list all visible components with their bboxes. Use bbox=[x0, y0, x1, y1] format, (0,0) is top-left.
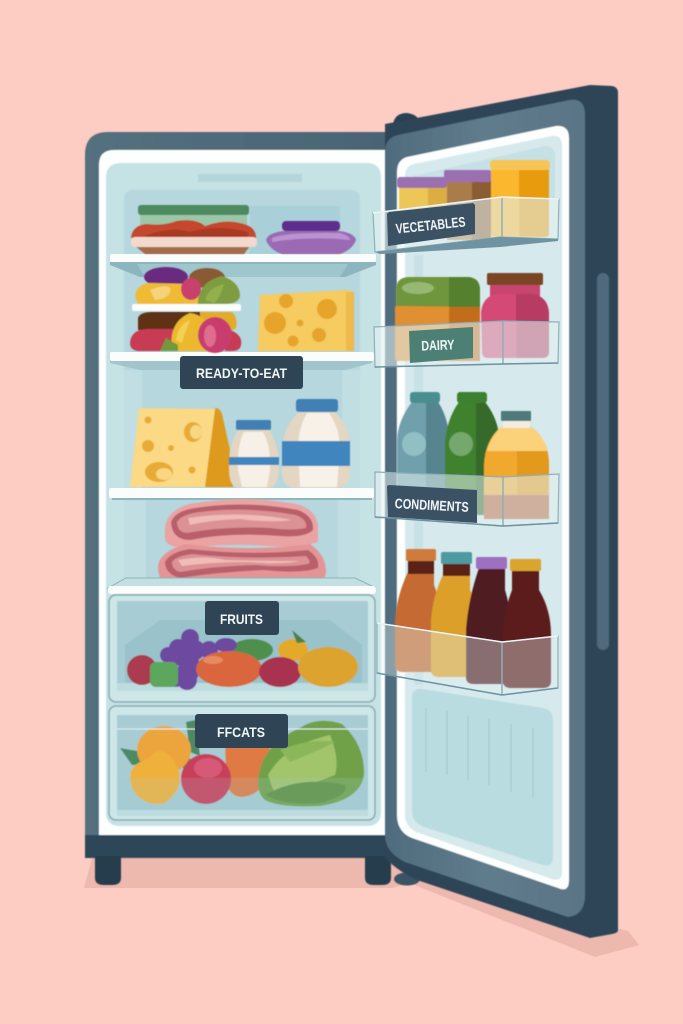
shelf 3 bbox=[109, 488, 374, 500]
door light inner bbox=[405, 136, 562, 880]
fruit: small yellow bbox=[278, 630, 308, 661]
open door bbox=[385, 85, 618, 938]
upper recess bbox=[250, 206, 340, 254]
label: ffcats: FFCATS bbox=[217, 724, 265, 740]
label: vegetables bbox=[387, 203, 475, 246]
label: dairy: DAIRY bbox=[421, 336, 455, 354]
handle bbox=[597, 273, 609, 650]
food: purple dish bbox=[266, 221, 356, 254]
refrigerator body bbox=[85, 132, 391, 885]
veg: cabbage bbox=[258, 721, 364, 806]
veg: red apple bbox=[181, 754, 231, 804]
fruit: yellow mango bbox=[298, 647, 358, 687]
floor shadow bbox=[84, 858, 639, 957]
fruit: orange bbox=[196, 651, 262, 687]
cabinet shell bbox=[85, 132, 390, 836]
veg: yellow apple bbox=[130, 751, 180, 804]
door foot bbox=[394, 872, 420, 886]
door row 4: sauce bottles bbox=[395, 549, 551, 688]
label: dairy bbox=[409, 327, 473, 363]
door dark shell bbox=[385, 85, 618, 938]
drawer: fruits bbox=[109, 595, 375, 702]
door bin 2 bbox=[374, 321, 559, 367]
veg: orange squash bbox=[225, 745, 270, 797]
door row 2: containers bbox=[395, 273, 549, 361]
label: ffcats bbox=[195, 714, 288, 748]
pink jar bbox=[481, 273, 549, 358]
label: condiments bbox=[387, 485, 477, 523]
back panel bbox=[124, 190, 360, 590]
door bin 3 bbox=[375, 472, 559, 526]
interior wall bbox=[106, 163, 381, 826]
bottle dark red bbox=[503, 559, 551, 688]
food: large milk bottle bbox=[282, 399, 350, 488]
door white liner bbox=[397, 126, 569, 889]
top slab bbox=[165, 499, 318, 548]
bottle caramel bbox=[395, 549, 440, 672]
bottle plum bbox=[466, 557, 510, 684]
bottle mustard bbox=[431, 552, 476, 677]
foot right bbox=[365, 856, 391, 885]
glass shelf above drawers bbox=[108, 578, 376, 594]
veg: orange back bbox=[137, 726, 191, 774]
bottle amber bbox=[484, 411, 549, 519]
green tub bbox=[395, 277, 480, 361]
label: fruits: FRUITS bbox=[220, 611, 263, 627]
door hinge knob bbox=[393, 113, 419, 124]
shelf 2 bbox=[110, 352, 374, 370]
fruit: apple red bbox=[127, 655, 157, 685]
fruit: grapes bbox=[160, 629, 237, 690]
foot left bbox=[95, 856, 121, 885]
door bin 1 bbox=[373, 197, 559, 254]
label: condiments: CONDIMENTS bbox=[394, 495, 469, 515]
shelf 1 bbox=[110, 254, 376, 277]
label: vegetables: VECETABLES bbox=[395, 213, 466, 237]
food: cheese wedge lower bbox=[130, 408, 233, 487]
door upper recess bbox=[413, 146, 555, 200]
label: ready-to-eat: READY-TO-EAT bbox=[196, 365, 287, 381]
bottle green bbox=[445, 392, 499, 515]
door bin 4 bbox=[377, 623, 558, 695]
drawer rim line bbox=[117, 728, 368, 730]
food: lasagna tray bbox=[131, 205, 257, 254]
jar brown bbox=[444, 170, 491, 240]
bottom slab bbox=[158, 544, 326, 587]
drawer: vegetables bbox=[109, 706, 375, 820]
food: meat slabs bbox=[158, 499, 326, 587]
jar amber bbox=[490, 160, 550, 237]
food: cheese wedge upper bbox=[258, 290, 354, 351]
back panel strips bbox=[124, 174, 360, 585]
base plinth bbox=[85, 835, 390, 858]
bottle teal bbox=[397, 392, 450, 490]
glass front bbox=[117, 778, 368, 810]
veg: leaves bbox=[120, 720, 200, 776]
label: ready-to-eat bbox=[180, 356, 303, 389]
door panel bbox=[385, 100, 585, 917]
door row 1: jars bbox=[397, 160, 550, 240]
lower panel bbox=[412, 689, 553, 865]
door row 3: bottles bbox=[397, 392, 549, 519]
fruit: green pepper bbox=[150, 662, 178, 687]
fruit: plum bbox=[259, 657, 301, 687]
fruit: green mango bbox=[231, 639, 273, 661]
food: small milk bottle bbox=[229, 420, 279, 488]
vertical rib bbox=[414, 255, 423, 685]
food: mixed vegetables plate bbox=[130, 267, 241, 353]
white liner bbox=[99, 150, 388, 835]
jar yellow bbox=[397, 177, 447, 236]
label: fruits bbox=[205, 601, 279, 635]
